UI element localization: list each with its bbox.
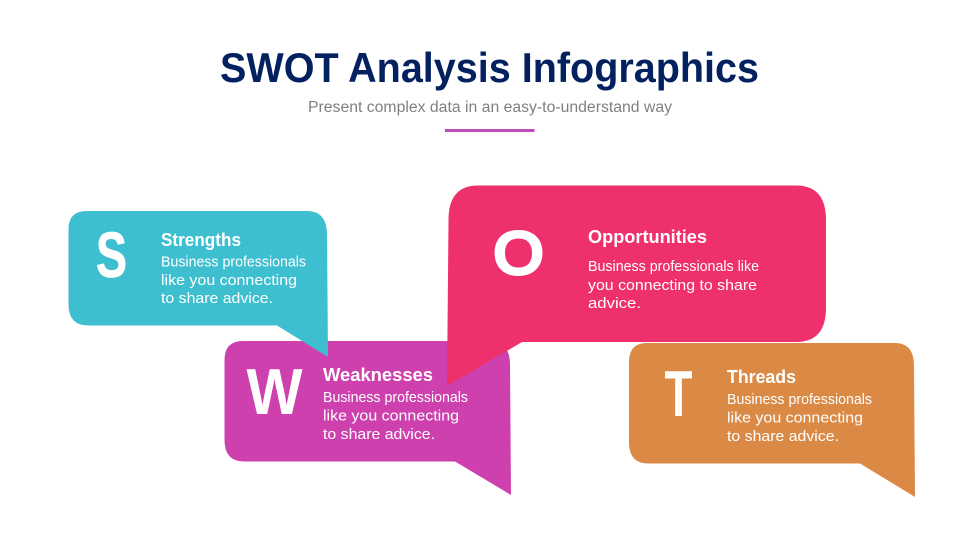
body text: opportunities: advice.: [588, 296, 641, 312]
panel: weaknesses: [224, 341, 511, 495]
title: SWOT Analysis Infographics: [220, 44, 759, 91]
body text: threads: to share advice.: [727, 429, 839, 445]
body text: threads: like you connecting: [727, 410, 863, 426]
body text: opportunities: [588, 259, 759, 312]
letter T: T: [664, 357, 692, 430]
letter W: W: [246, 355, 303, 428]
letter O: O: [494, 220, 543, 286]
panel: strengths: [68, 211, 328, 357]
panel: threads: [629, 343, 915, 497]
body text: strengths: [161, 254, 306, 307]
subtitle: Present complex data in an easy-to-understand way: [308, 99, 672, 116]
body text: strengths: Business professionals: [161, 254, 306, 270]
body text: opportunities: you connecting to share: [588, 278, 757, 294]
letter S: S: [96, 219, 127, 291]
body text: strengths: like you connecting: [161, 273, 297, 289]
heading: weaknesses: Weaknesses: [323, 365, 433, 385]
speech bubble: threads: [629, 343, 915, 497]
body text: weaknesses: to share advice.: [323, 427, 435, 443]
body text: weaknesses: [323, 390, 468, 443]
body text: opportunities: Business professionals like: [588, 259, 759, 275]
body text: weaknesses: like you connecting: [323, 408, 459, 424]
title underline: [445, 129, 534, 132]
body text: threads: [727, 392, 872, 445]
speech bubble: weaknesses: [224, 341, 511, 495]
heading: strengths: Strengths: [161, 230, 241, 250]
heading: threads: Threads: [727, 367, 796, 387]
body text: threads: Business professionals: [727, 392, 872, 408]
speech bubble: strengths: [68, 211, 328, 357]
panel: opportunities: [447, 186, 826, 386]
body text: strengths: to share advice.: [161, 291, 273, 307]
speech bubble: opportunities: [447, 186, 826, 386]
body text: weaknesses: Business professionals: [323, 390, 468, 406]
heading: opportunities: Opportunities: [588, 227, 707, 247]
